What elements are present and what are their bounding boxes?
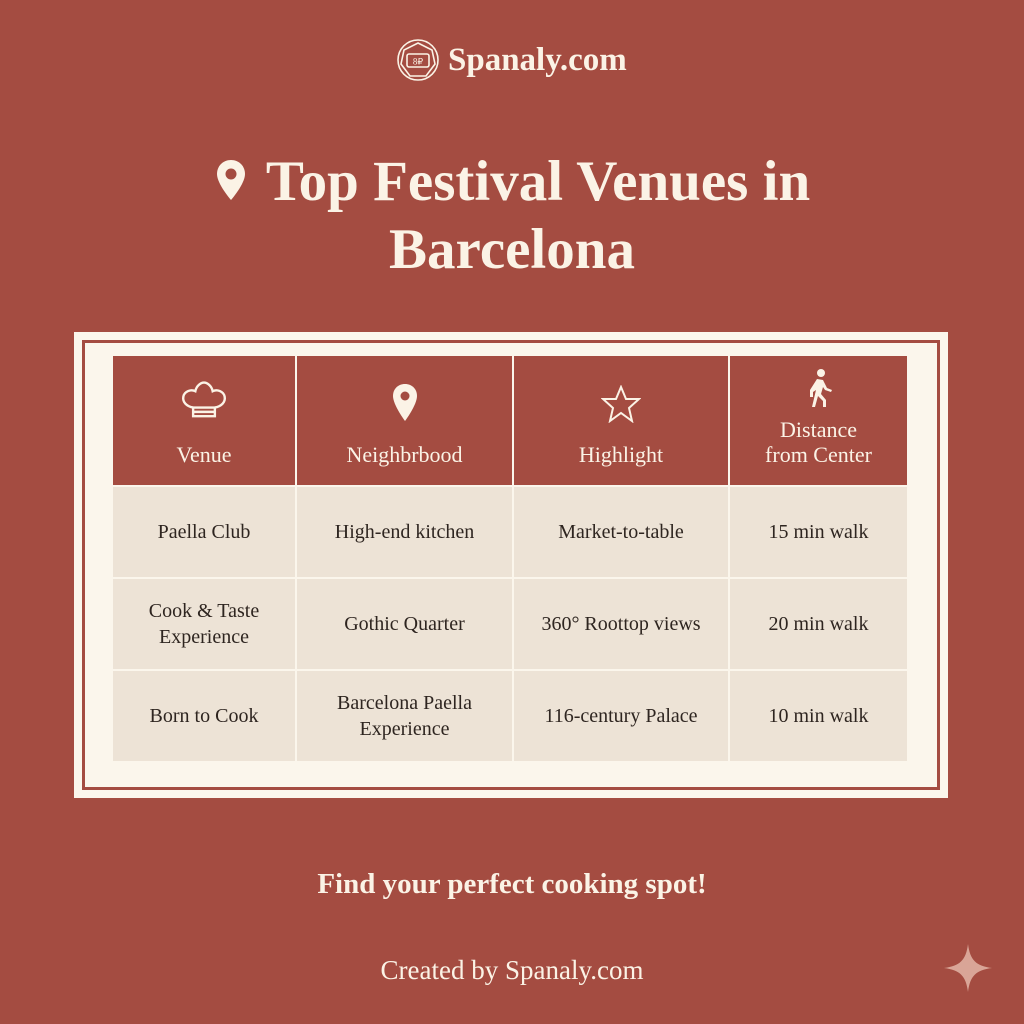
table: Born to Cook [150, 705, 258, 727]
logo [397, 39, 627, 81]
table: 360° Roottop views [541, 613, 701, 635]
title: Barcelona [389, 218, 635, 281]
title [217, 150, 810, 281]
table [113, 356, 907, 761]
header: highlight [513, 355, 729, 486]
table: Gothic Quarter [344, 613, 465, 635]
header: highlight: Highlight [579, 442, 663, 467]
header: venue: Venue [176, 442, 231, 467]
header: distance: from Center [765, 442, 872, 467]
table: Cook & Taste [149, 600, 259, 622]
logo: Spanaly.com [448, 42, 627, 78]
table: Barcelona Paella [337, 692, 472, 714]
footer credit: Created by Spanaly.com [381, 955, 643, 985]
header: venue [112, 355, 296, 486]
title: Top Festival Venues in [266, 150, 810, 213]
table: 116-century Palace [544, 705, 698, 727]
icon: logo gem [397, 39, 439, 81]
table: 20 min walk [768, 613, 868, 635]
icon: sparkle [944, 944, 992, 992]
header: distance: Distance [780, 417, 857, 442]
table: Paella Club [158, 521, 250, 543]
icon: map pin [217, 160, 245, 200]
table: Experience [159, 626, 249, 648]
table: Experience [360, 718, 449, 740]
panel: venues table [74, 332, 948, 798]
call to action: Find your perfect cooking spot! [317, 868, 707, 900]
table: High-end kitchen [335, 521, 474, 543]
table: 10 min walk [768, 705, 868, 727]
table: Market-to-table [558, 521, 684, 543]
table: 15 min walk [768, 521, 868, 543]
header: neighborhood: Neighbrbood [346, 442, 463, 467]
header: neighborhood [296, 355, 513, 486]
icon: logo gem: 8₽ [413, 56, 423, 66]
header: distance [729, 355, 908, 486]
